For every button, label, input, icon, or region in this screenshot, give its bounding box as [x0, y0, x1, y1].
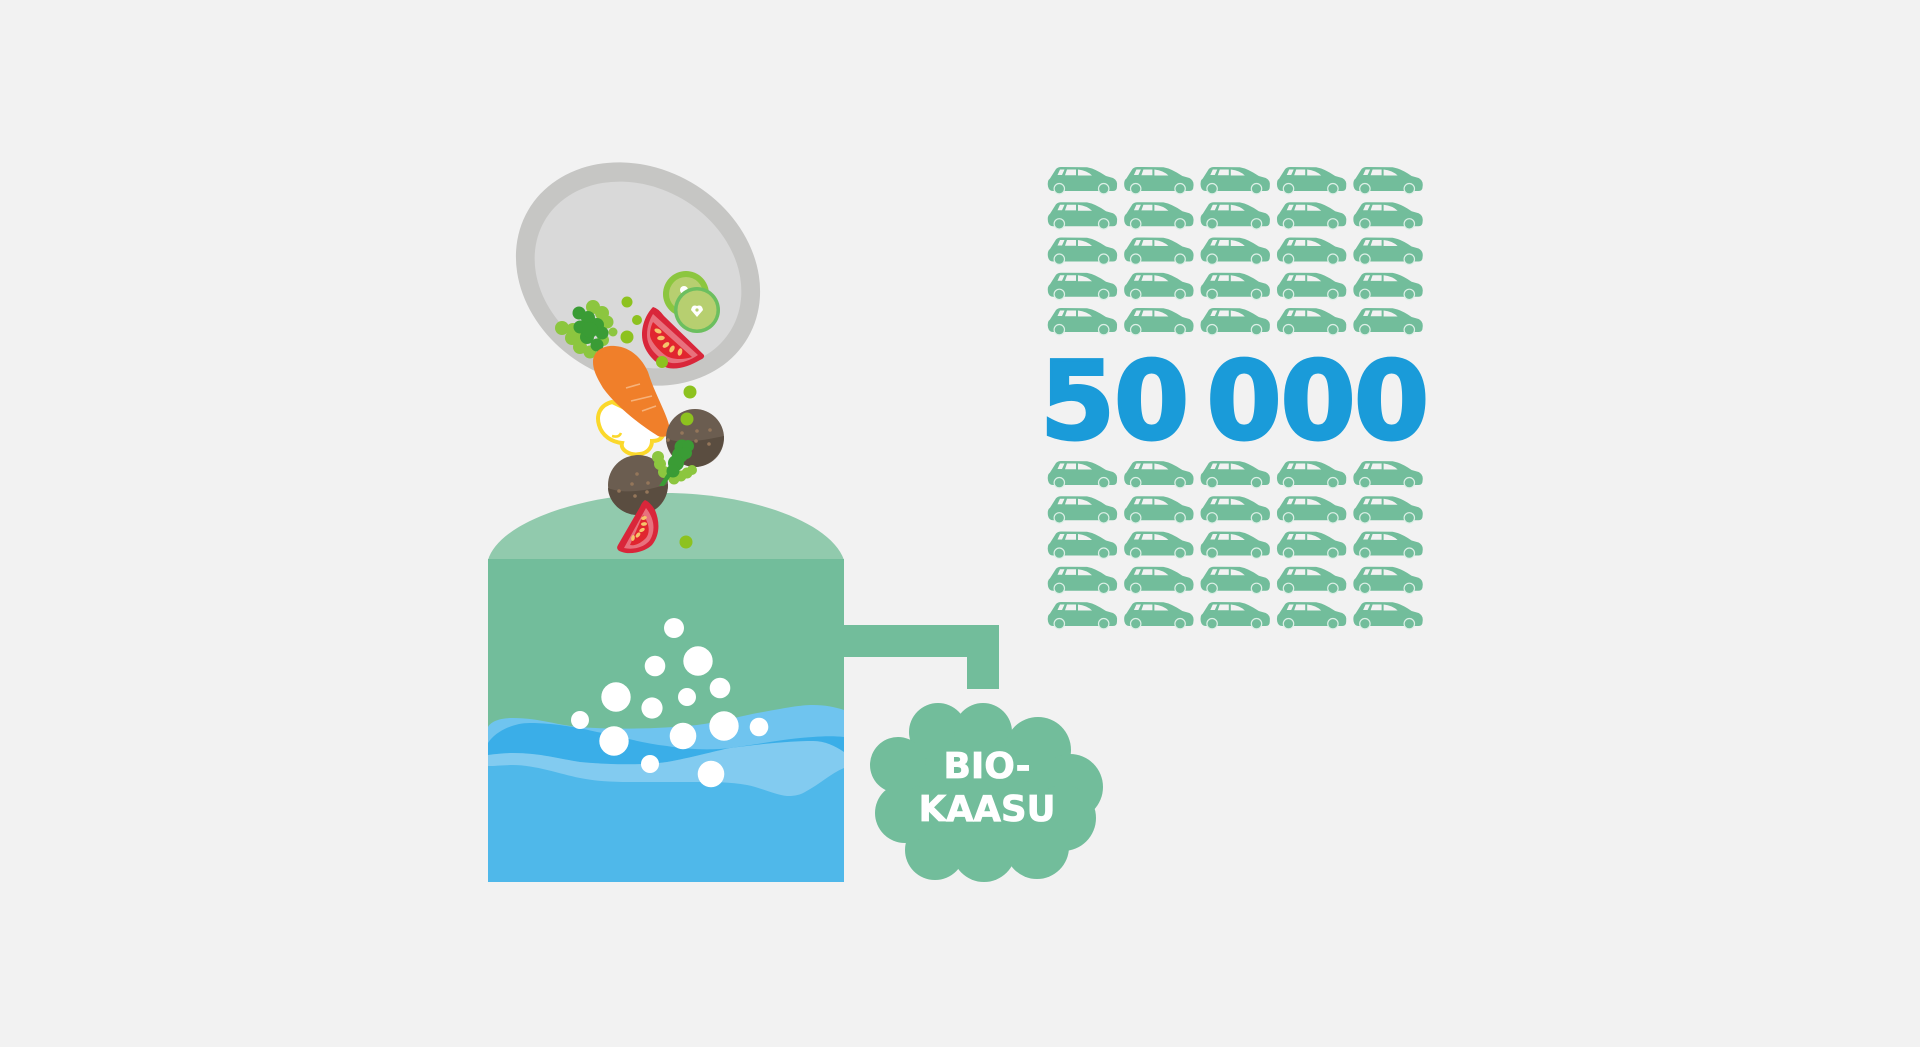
gas bubbles — [571, 618, 768, 787]
big number — [1040, 340, 1429, 464]
big number: 000 — [1206, 340, 1429, 464]
biogas cloud: KAASU — [919, 789, 1055, 830]
cloud label: BIO- — [943, 746, 1031, 787]
potato left — [608, 455, 668, 515]
lettuce leaf between potatoes — [652, 440, 697, 486]
lettuce leaf in bowl — [555, 300, 618, 358]
cars grid top — [1048, 167, 1423, 335]
tank dome — [488, 493, 844, 560]
cucumber slices — [663, 271, 720, 333]
biogas tank — [488, 493, 999, 882]
green peas — [620, 296, 696, 548]
big number: 50 — [1040, 340, 1189, 464]
cars grid bottom — [1048, 461, 1423, 629]
carrot — [593, 346, 670, 437]
tank body — [488, 559, 844, 882]
biogas cloud — [870, 703, 1103, 882]
water — [488, 705, 844, 882]
food falling from the bowl — [555, 271, 724, 553]
tomato wedge in bowl — [642, 307, 704, 369]
potato right — [666, 409, 724, 467]
yellow pepper ring — [598, 402, 662, 454]
tomato wedge falling — [617, 500, 658, 553]
bowl — [475, 119, 801, 429]
pipe — [844, 625, 999, 689]
